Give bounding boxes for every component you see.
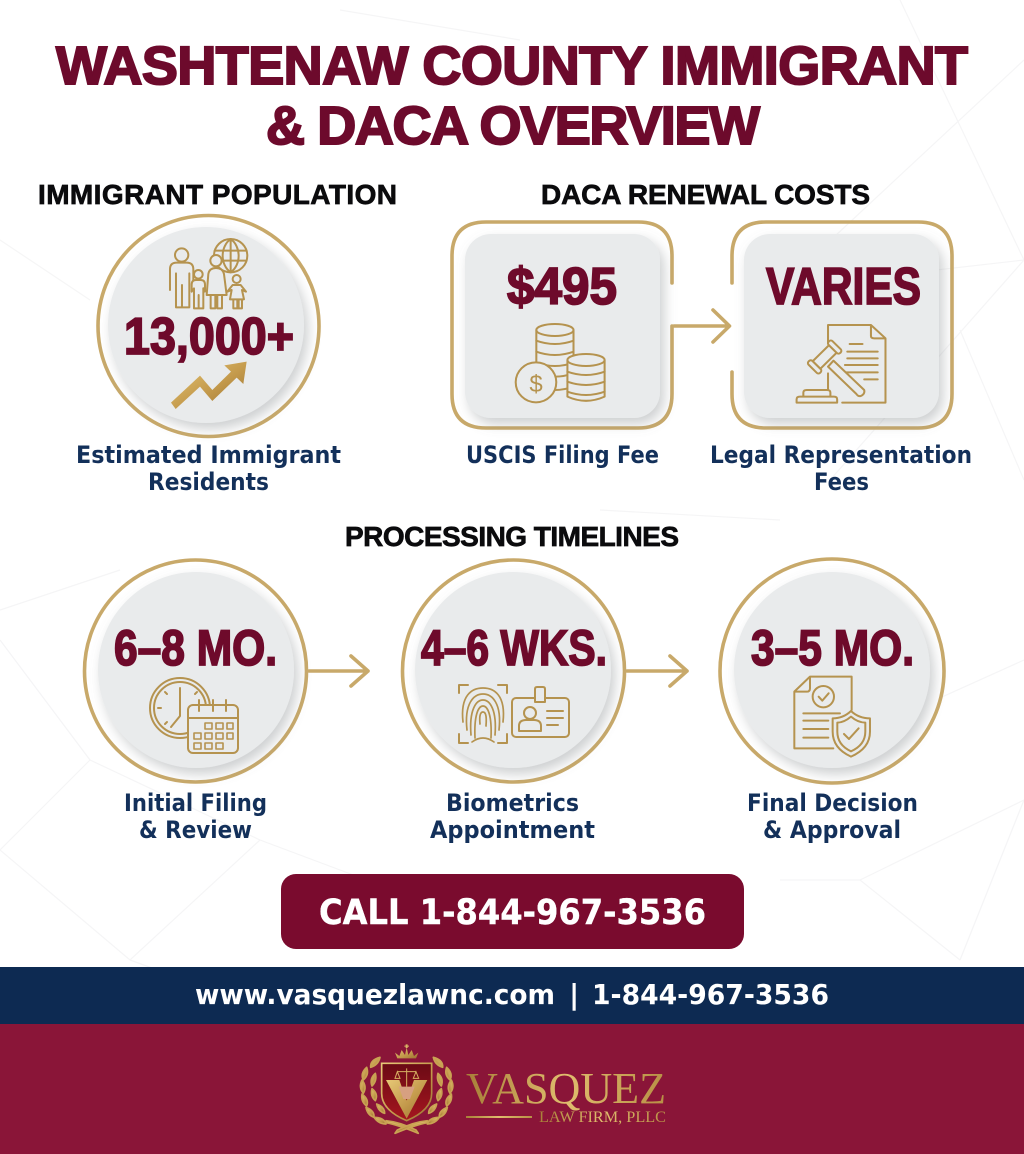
contact band: 1-844-967-3536 — [592, 978, 829, 1011]
label: estimated immigrant residents: Estimated Immigrant — [76, 441, 341, 469]
title — [56, 36, 968, 156]
logo wordmark: VASQUEZ — [466, 1064, 666, 1113]
logo: Vasquez Law Firm — [360, 1044, 666, 1133]
label: final decision and approval: Final Decision — [747, 789, 918, 817]
panel: legal fees card — [732, 222, 952, 428]
label: legal representation fees: Legal Representation — [710, 441, 972, 469]
icon: rising arrow — [171, 362, 247, 409]
label: initial filing and review: Initial Filing — [124, 789, 267, 817]
label: legal representation fees: Fees — [814, 468, 869, 496]
title: & DACA OVERVIEW — [266, 96, 760, 156]
icon: document and shield — [794, 677, 870, 757]
value: 13,000+: 13,000+ — [124, 308, 294, 366]
label: legal representation fees — [710, 441, 972, 496]
arrow: USCIS fee to legal fees — [674, 310, 730, 342]
icon: clock and calendar — [150, 678, 238, 753]
value: 6-8 months: 6–8 MO. — [114, 620, 277, 676]
label: final decision and approval: & Approval — [763, 816, 901, 844]
call to action button — [281, 874, 744, 949]
icon: fingerprint and ID badge — [459, 685, 569, 743]
label: estimated immigrant residents — [76, 441, 341, 496]
icon: family and globe — [170, 239, 247, 308]
call to action button: CALL 1-844-967-3536 — [319, 893, 706, 933]
heading: immigrant population: IMMIGRANT POPULATION — [38, 179, 397, 210]
value: VARIES: VARIES — [766, 258, 921, 316]
label: biometrics appointment: Appointment — [430, 816, 595, 844]
label: final decision and approval — [747, 789, 918, 844]
logo emblem — [360, 1044, 453, 1133]
panel: biometrics circle — [402, 560, 624, 782]
logo wordmark: LAW FIRM, PLLC — [539, 1109, 666, 1126]
label: estimated immigrant residents: Residents — [148, 468, 269, 496]
heading: DACA renewal costs: DACA RENEWAL COSTS — [541, 179, 870, 210]
label: biometrics appointment — [430, 789, 595, 844]
arrow: biometrics to decision — [627, 656, 687, 686]
icon: coins — [516, 324, 605, 402]
value: 3-5 months: 3–5 MO. — [751, 620, 914, 676]
heading: processing timelines: PROCESSING TIMELINES — [345, 521, 679, 552]
footer band — [0, 1024, 1024, 1154]
label: USCIS filing fee: USCIS Filing Fee — [466, 441, 659, 469]
panel: initial filing circle — [84, 560, 306, 782]
arrow: filing to biometrics — [309, 656, 368, 686]
value: 4-6 weeks: 4–6 WKS. — [421, 620, 607, 676]
panel: USCIS fee card: $ — [529, 371, 543, 398]
panel: USCIS fee card — [452, 222, 672, 428]
contact band: | — [569, 978, 579, 1011]
label: initial filing and review — [124, 789, 267, 844]
title: WASHTENAW COUNTY IMMIGRANT — [56, 36, 968, 96]
panel: final decision circle — [720, 559, 944, 783]
label: biometrics appointment: Biometrics — [446, 789, 579, 817]
label: initial filing and review: & Review — [139, 816, 252, 844]
contact band — [0, 967, 1024, 1024]
contact band: www.vasquezlawnc.com — [195, 978, 555, 1011]
icon: gavel and document — [797, 325, 885, 403]
panel: immigrant population circle — [98, 216, 319, 436]
value: $495: $495 — [507, 258, 617, 316]
